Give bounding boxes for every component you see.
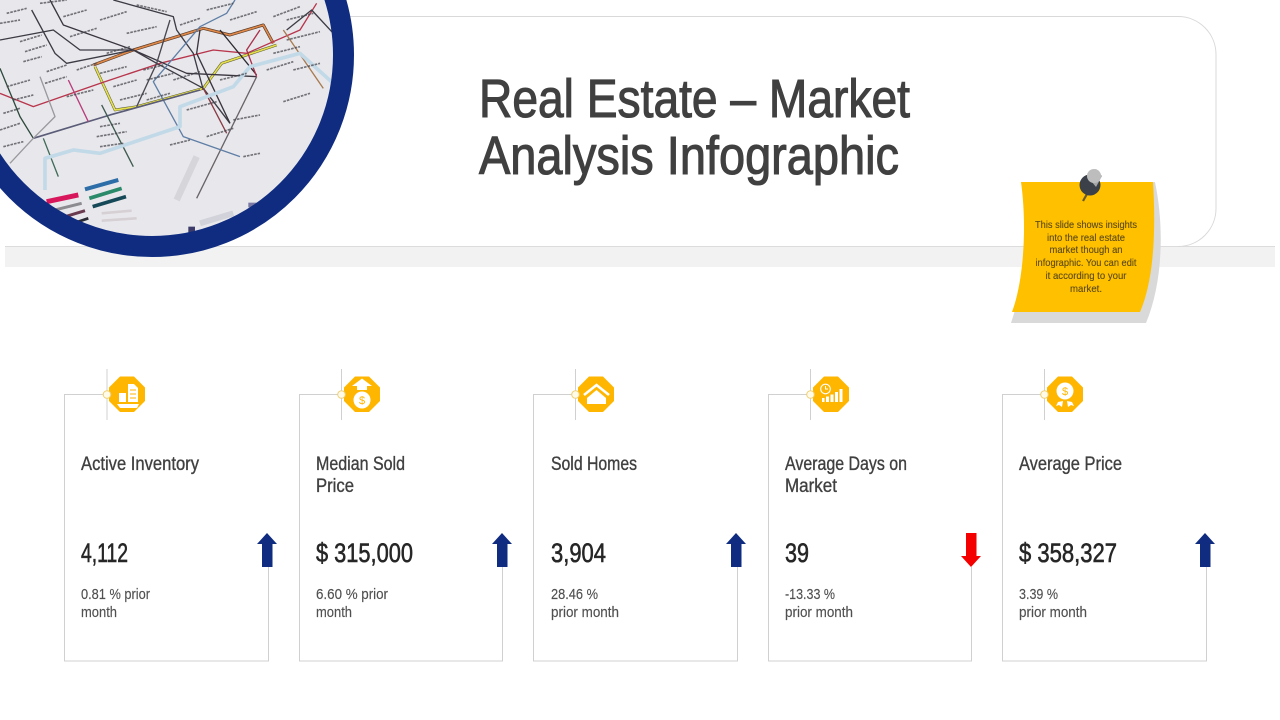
value: 4,112 [81, 538, 128, 568]
arrow up [492, 533, 512, 567]
card frame [64, 369, 268, 661]
change note [785, 586, 853, 621]
change note: month [316, 604, 352, 621]
icon: house [572, 376, 614, 412]
change note: 3.39 % [1019, 586, 1058, 603]
heading: Median Sold [316, 454, 405, 475]
icon: price badge: $ [1062, 386, 1068, 398]
heading: Price [316, 476, 354, 497]
note text: market. [1070, 283, 1102, 295]
change note [81, 586, 150, 621]
heading [316, 454, 405, 497]
card frame [534, 369, 738, 661]
change note [316, 586, 388, 621]
note text: infographic. You can edit [1036, 257, 1137, 269]
note paper [1012, 182, 1154, 312]
value: $ 315,000 [316, 538, 413, 568]
title: Analysis Infographic [479, 126, 899, 186]
change note [1019, 586, 1087, 621]
change note [551, 586, 619, 621]
change note: 28.46 % [551, 586, 598, 603]
change note: month [81, 604, 117, 621]
value: 39 [785, 538, 809, 568]
heading: Average Days on [785, 454, 907, 475]
header band [5, 246, 1275, 267]
heading: Average Price [1019, 454, 1122, 475]
title: Real Estate – Market [479, 69, 910, 129]
header panel [300, 16, 1216, 246]
note text [1035, 219, 1137, 295]
value: $ 358,327 [1019, 538, 1117, 568]
circular map photo [0, 0, 344, 247]
arrow up [1195, 533, 1215, 567]
card: Median Sold Price [300, 369, 512, 661]
card: Sold Homes [534, 369, 746, 661]
change note: 6.60 % prior [316, 586, 388, 603]
heading: Sold Homes [551, 454, 637, 475]
note shadow [1011, 182, 1161, 323]
card frame [768, 369, 972, 661]
title [479, 69, 910, 186]
icon: clock and bars [807, 376, 849, 412]
change note: prior month [551, 604, 619, 621]
card: Average Price [1002, 369, 1215, 661]
change note: prior month [785, 604, 853, 621]
sticky note [1011, 169, 1161, 323]
icon: push pin [1080, 169, 1102, 201]
card frame [1002, 369, 1206, 661]
card frame [300, 369, 502, 661]
arrow up [257, 533, 277, 567]
arrow down [961, 533, 981, 567]
value: 3,904 [551, 538, 606, 568]
note text: market though an [1050, 244, 1123, 256]
card: Average Days on Market [768, 369, 981, 661]
heading: Active Inventory [81, 454, 199, 475]
note text: This slide shows insights [1035, 219, 1137, 231]
icon: inventory [103, 376, 145, 412]
card: Active Inventory [64, 369, 277, 661]
icon: money bag [338, 376, 380, 412]
heading [785, 454, 907, 497]
change note: 0.81 % prior [81, 586, 150, 603]
change note: prior month [1019, 604, 1087, 621]
note text: into the real estate [1047, 232, 1125, 244]
note text: it according to your [1046, 270, 1127, 282]
icon: price badge [1041, 376, 1083, 412]
icon: money bag: $ [359, 395, 365, 407]
arrow up [726, 533, 746, 567]
change note: -13.33 % [785, 586, 835, 603]
heading: Market [785, 476, 838, 497]
